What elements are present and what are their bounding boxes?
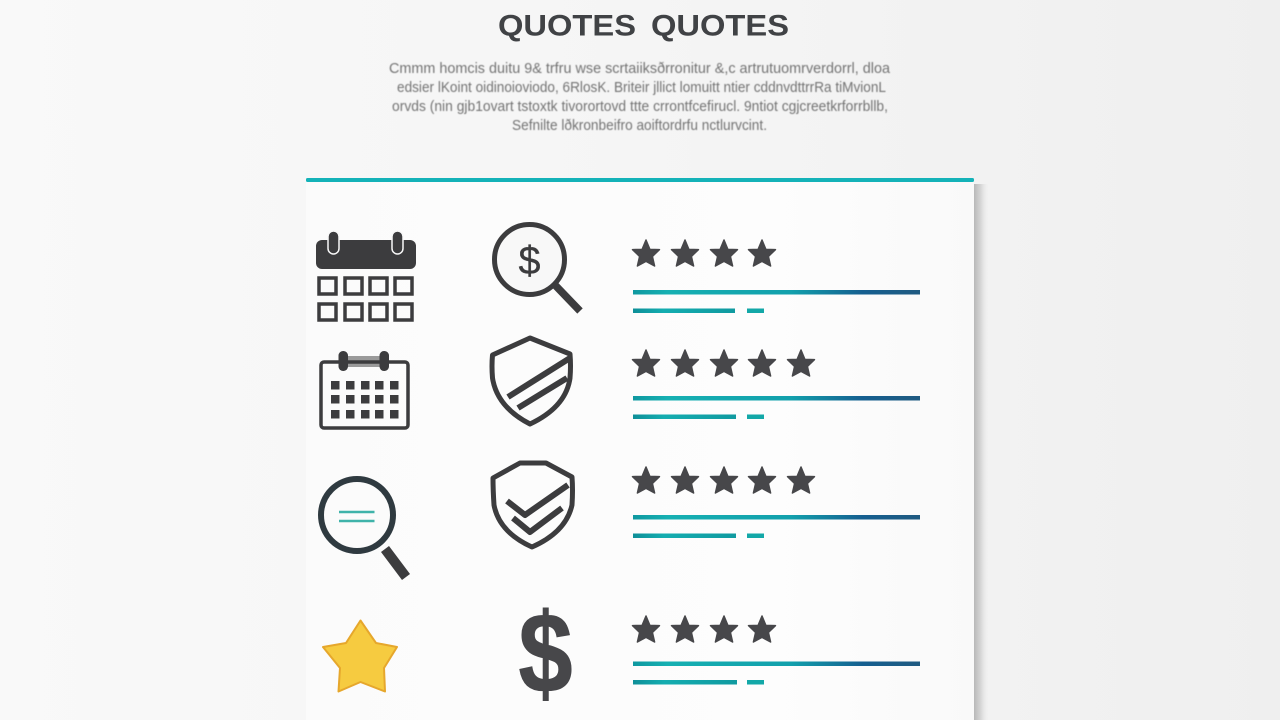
- intro text block: edsier lKoint oidinoioviodo, 6RlosK. Briteir jllict lomuitt ntier cddnvdttrrRa tiMvionL: [397, 80, 886, 96]
- bars: row 3: [633, 515, 920, 538]
- panel: ratings card: [306, 178, 989, 720]
- intro text block: orvds (nin gjb1ovart tstoxtk tivorortovd ttte crrontfcefirucl. 9ntiot cgjcreetkrforrbllb,: [392, 99, 888, 115]
- stars: row 2: [632, 350, 814, 376]
- stars: row 4: [632, 616, 776, 642]
- intro text block: Sefnilte lðkronbeifro aoiftordrfu nctlurvcint.: [512, 118, 767, 134]
- bars: row 4: [633, 662, 920, 684]
- stars: row 3: [632, 467, 814, 493]
- title: QUOTES: [651, 10, 789, 42]
- icon: magnifier with dollar: $: [518, 239, 540, 283]
- stars: row 1: [632, 240, 776, 266]
- intro text block: Cmmm homcis duitu 9& trfru wse scrtaiiksðrronitur &,c artrutuomrverdorrl, dloa: [389, 61, 891, 77]
- intro text block: [389, 61, 891, 134]
- icon: gold star: [323, 620, 397, 692]
- icon: shield with checkmarks: [493, 463, 572, 547]
- bars: row 1: [633, 290, 920, 313]
- title: [498, 10, 789, 42]
- icon: dollar sign: $: [518, 590, 572, 716]
- title: QUOTES: [498, 10, 636, 42]
- icon: magnifier with dollar: [494, 224, 580, 311]
- icon: calendar with rings: [321, 351, 408, 428]
- bars: row 2: [633, 396, 920, 419]
- icon: magnifier with lines: [321, 479, 406, 577]
- icon: calendar with dark header: [316, 231, 416, 320]
- icon: shield with stripes: [492, 338, 570, 424]
